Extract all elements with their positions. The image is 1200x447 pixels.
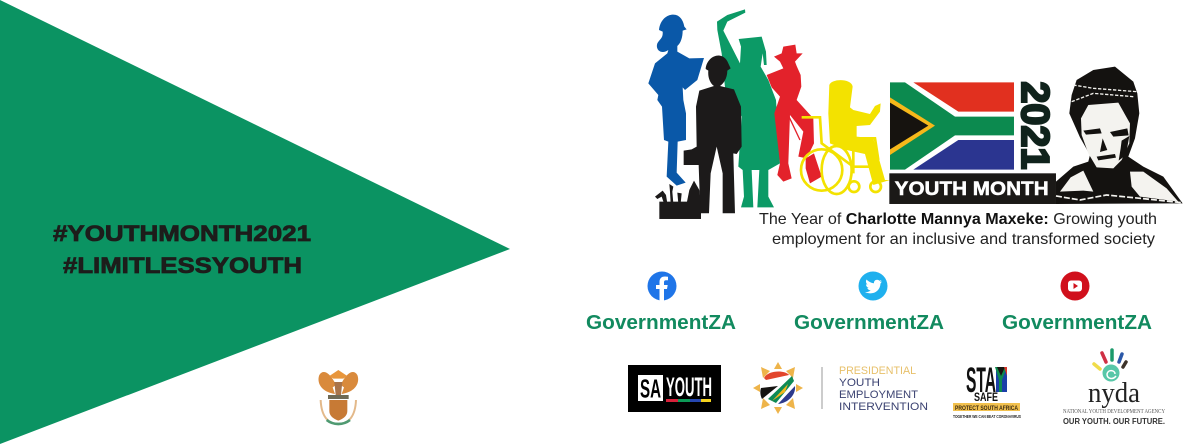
social: youtube: GovernmentZA — [1002, 312, 1152, 334]
youth month logo — [889, 67, 1183, 204]
social: facebook: GovernmentZA — [586, 312, 736, 334]
tagline: The Year of Charlotte Mannya Maxeke: Growing youth — [759, 211, 1157, 228]
logo: Presidential Youth Employment Intervention: INTERVENTION — [839, 401, 928, 413]
icon: toolbox — [655, 181, 701, 219]
tagline — [759, 211, 1157, 248]
panel: green triangle — [0, 0, 510, 444]
youth month banner — [889, 173, 1056, 204]
logo: NYDA — [1063, 350, 1165, 426]
logo: Stay Safe: STA — [966, 361, 996, 400]
logo: NYDA: OUR YOUTH. OUR FUTURE. — [1063, 417, 1165, 426]
logo: SA Youth: SA — [640, 374, 661, 404]
logo: Stay Safe: SAFE — [974, 392, 998, 404]
icon: twitter — [858, 272, 888, 300]
2021 vertical label: 2021 — [1013, 81, 1057, 169]
youth month silhouettes — [648, 9, 890, 219]
icon: youtube — [1060, 272, 1090, 300]
logo: SA Youth — [628, 365, 721, 412]
logo: Stay Safe — [953, 361, 1021, 419]
icon: charlotte maxeke portrait — [1056, 67, 1183, 204]
icon: coat of arms — [318, 370, 358, 424]
logo: Presidential Youth Employment Intervention: PRESIDENTIAL — [839, 365, 916, 377]
icon: sun emblem — [753, 362, 803, 414]
hashtags: #LIMITLESSYOUTH — [63, 253, 302, 278]
icon: green graduate — [717, 9, 780, 207]
icon: yellow wheelchair user — [801, 80, 890, 194]
logo: Presidential Youth Employment Intervention: YOUTH — [839, 377, 880, 389]
social: twitter: GovernmentZA — [794, 312, 944, 334]
icon: flag Y — [995, 367, 1007, 392]
icon: facebook — [648, 272, 676, 300]
social: twitter — [794, 272, 944, 334]
icon: south african flag — [890, 82, 1014, 170]
hashtags: #YOUTHMONTH2021 — [53, 221, 311, 246]
icon: black worker — [684, 56, 742, 213]
youth month banner: YOUTH MONTH — [895, 179, 1049, 200]
logo: Presidential Youth Employment Intervention: EMPLOYMENT — [839, 389, 918, 401]
logo: NYDA: nyda — [1088, 377, 1140, 409]
logo: Stay Safe: PROTECT SOUTH AFRICA — [955, 405, 1018, 412]
social: youtube — [1002, 272, 1152, 334]
logo: NYDA: NATIONAL YOUTH DEVELOPMENT AGENCY — [1063, 408, 1165, 415]
hashtags — [53, 221, 311, 278]
tagline: employment for an inclusive and transformed society — [772, 231, 1155, 248]
logo: SA Youth: YOUTH — [666, 372, 712, 402]
logo: Stay Safe: TOGETHER WE CAN BEAT CORONAVIRUS — [953, 414, 1021, 419]
icon: hand spiral — [1094, 350, 1126, 382]
social: facebook — [586, 272, 736, 334]
icon: blue woman — [648, 15, 704, 186]
logo: Presidential Youth Employment Intervention — [753, 362, 928, 414]
icon: red figure — [767, 45, 814, 182]
